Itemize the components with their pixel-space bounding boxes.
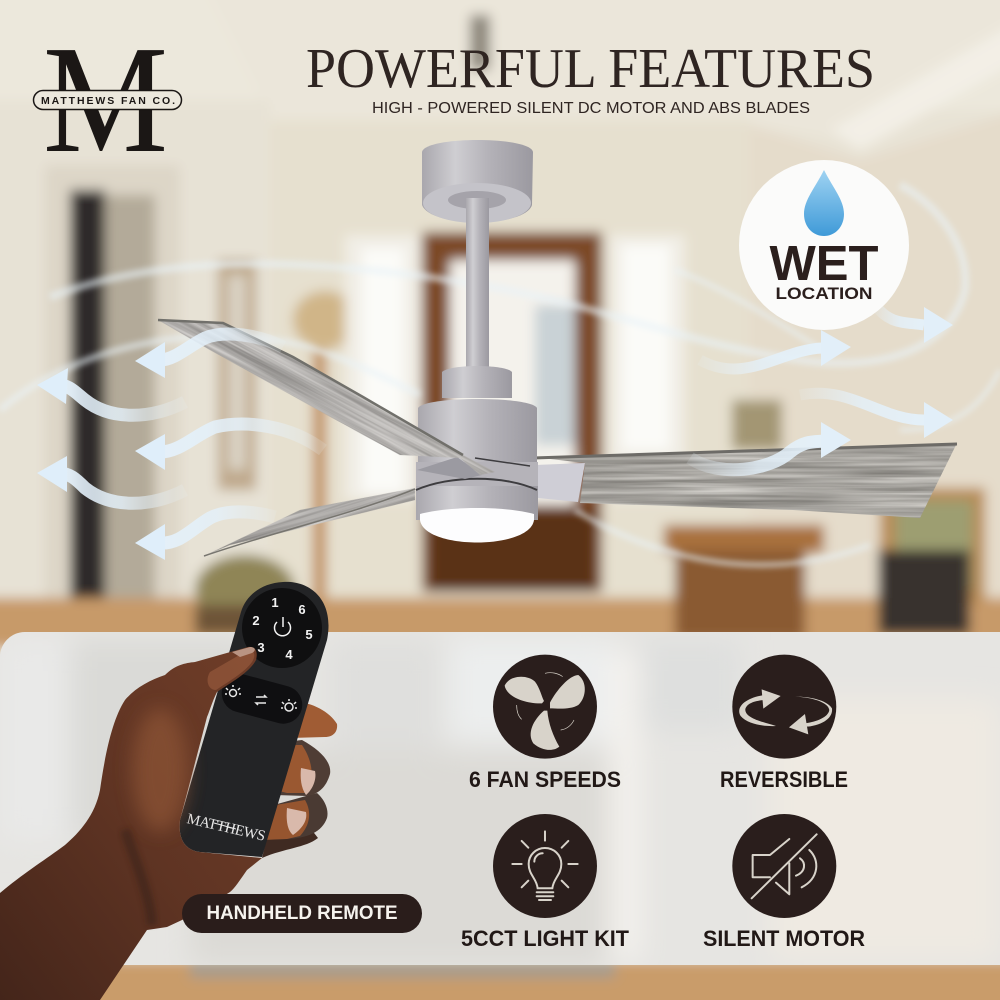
badge: wet location [739,160,909,330]
air flow ribbons [0,185,1000,565]
motor housing [416,366,538,520]
light kit [420,508,534,542]
label: 6 fan speeds: 6 FAN SPEEDS [469,767,621,792]
wrist shading [125,830,152,925]
remote brand: MATTHEWS [185,811,267,845]
remote speed numbers: 4 [285,647,293,662]
fan blades behind motor [183,428,957,617]
arrow right 3 [690,422,851,470]
label pill: handheld remote: HANDHELD REMOTE [206,903,398,924]
remote power symbol [275,617,290,636]
hand holding remote [0,582,337,1000]
label: silent motor: SILENT MOTOR [703,926,865,951]
remote speed numbers: 5 [305,627,313,642]
panel: features [0,632,1000,965]
finger: middle [275,740,330,796]
remote control [180,582,329,857]
finger: index [290,702,337,738]
downrod [466,198,489,370]
arrow right 1 [700,330,851,369]
logo [34,15,182,185]
subtitle: HIGH - POWERED SILENT DC MOTOR AND ABS BLADES [372,100,810,117]
arrow left 2 [37,368,185,415]
blade: right [533,443,957,518]
icon: light kit [493,814,597,918]
badge word: wet: WET [770,237,879,291]
label: reversible: REVERSIBLE [720,767,848,792]
hand, palm, forearm and thumb [0,647,262,1000]
remote speed numbers: 6 [298,602,306,617]
icon: reversible [732,655,836,759]
blade: lower left [183,428,434,617]
arrow left 5 [135,512,275,560]
label pill: handheld remote [182,894,422,933]
arrow left 4 [37,456,185,503]
thumbnail [232,647,255,657]
finger: ring [262,793,328,840]
remote speed numbers: 3 [257,640,265,655]
air flow arrows [37,305,953,560]
arrow left 3 [135,424,323,470]
arrow left 1 [135,334,283,378]
title: POWERFUL FEATURES [306,38,875,100]
fan body [416,140,538,542]
thumb highlight [208,650,254,690]
palm highlight [132,708,188,832]
icon: silent motor [732,814,836,918]
arrow right 4 [800,393,953,438]
badge word: location: LOCATION [776,285,872,303]
finger: little [262,815,318,858]
icon: water drop [804,170,844,236]
blade: left upper [94,180,559,615]
label: 5cct light kit: 5CCT LIGHT KIT [461,926,630,951]
logo name pill: MATTHEWS FAN CO. [41,95,175,107]
remote speed numbers: 1 [271,595,279,610]
logo name pill [34,90,182,110]
ceiling canopy [422,140,533,223]
remote speed numbers: 2 [252,613,260,628]
icon: 6 fan speeds [493,655,597,759]
logo letter M: M [43,15,168,185]
arrow right 2 [875,305,953,343]
remote speed numbers [252,595,313,662]
remote buttons [217,670,307,728]
